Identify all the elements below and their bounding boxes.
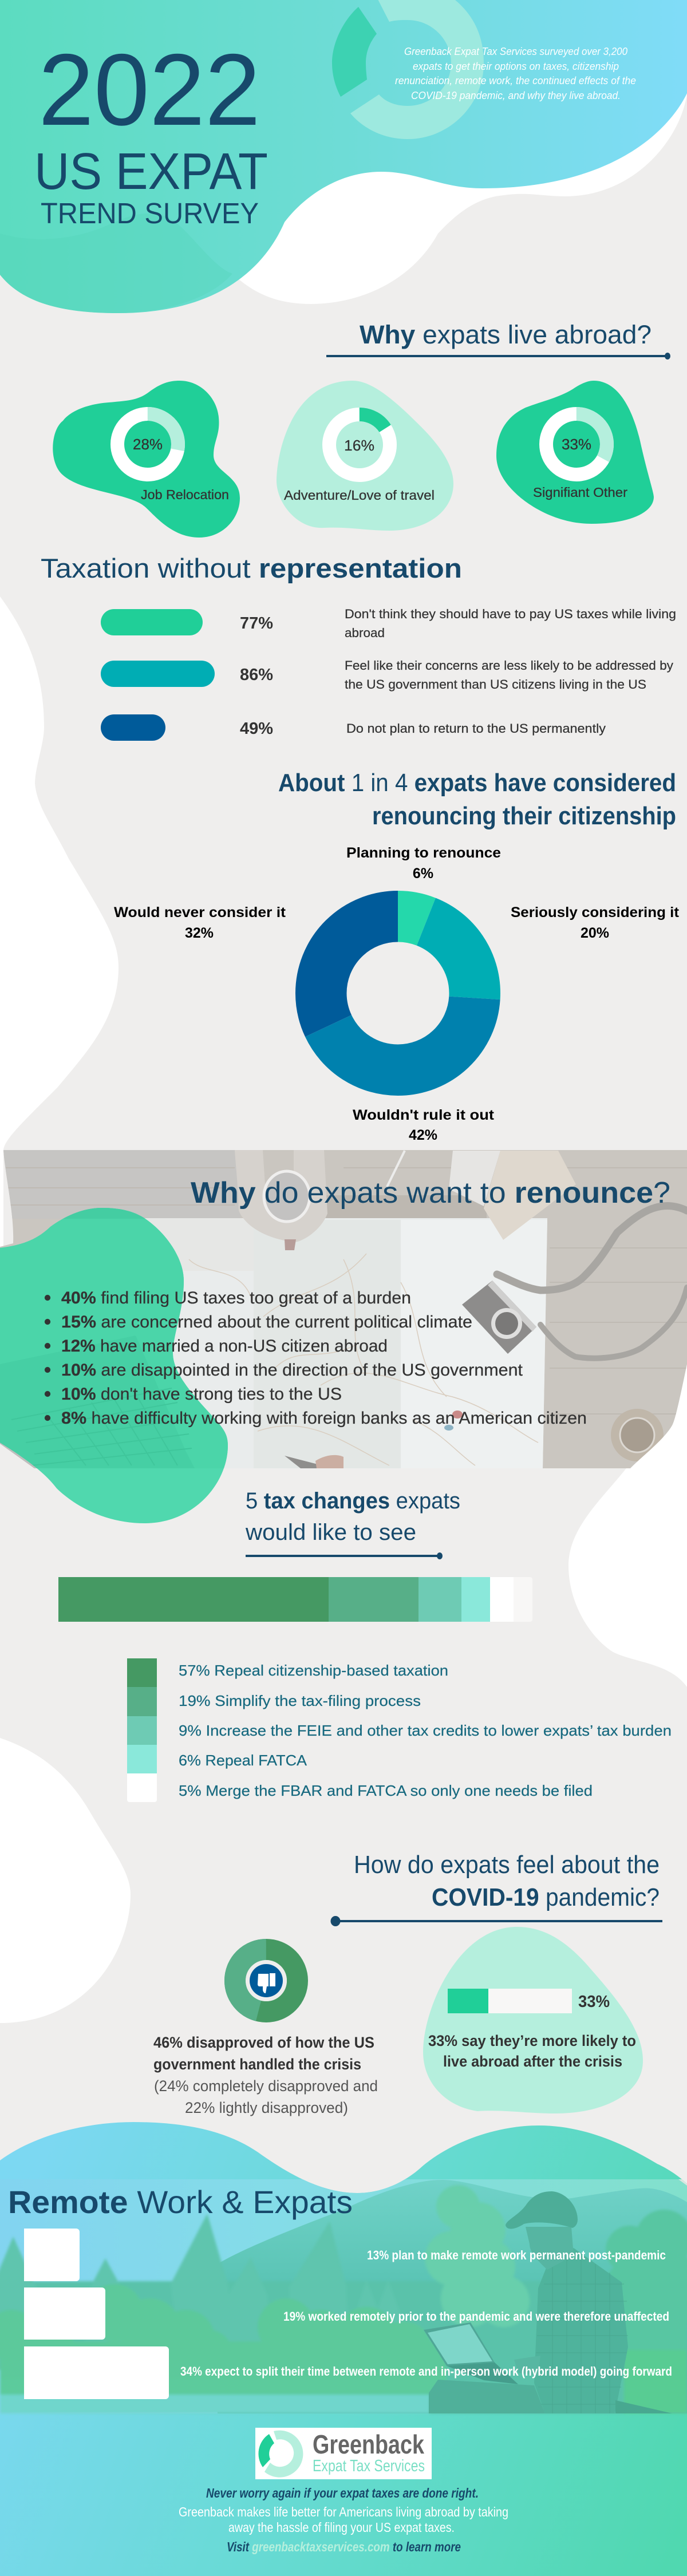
- panel: adventure: Adventure/Love of travel: [284, 488, 435, 503]
- panel: more likely to live abroad: 33%: [578, 1993, 610, 2011]
- chart labels: 20%: [581, 925, 609, 941]
- heading: about 1 in 4: [278, 769, 676, 830]
- heading: 5 tax changes: 5 tax changes expats: [246, 1488, 460, 1514]
- row: 77 percent: 77%: [240, 614, 273, 633]
- heading: why expats live abroad: Why expats live abroad?: [360, 320, 652, 349]
- panel: disapproval donut: [235, 1950, 298, 2012]
- bullet list: reasons to renounce: [45, 1289, 587, 1428]
- panel: significant other: Signifiant Other: [533, 485, 627, 500]
- heading divider with dot: [246, 1552, 443, 1559]
- bullet list: reasons to renounce: 12% have married a non-US citizen abroad: [61, 1337, 388, 1356]
- row: 49 percent: Do not plan to return to the US permanently: [346, 721, 606, 736]
- logo: greenback: Greenback: [313, 2429, 424, 2459]
- bullet list: reasons to renounce: 15% are concerned about the current political climate: [61, 1313, 472, 1332]
- title: 2022: [38, 33, 260, 147]
- chart labels: 6%: [413, 866, 433, 882]
- disapproval text: government handled the crisis: [153, 2056, 361, 2073]
- intro paragraph: expats to get their options on taxes, citizenship: [413, 61, 619, 72]
- heading: 5 tax changes: [245, 1488, 460, 1545]
- closing message: Visit greenbacktaxservices.com to learn more: [227, 2539, 461, 2554]
- heading: covid-19: How do expats feel about the: [354, 1851, 660, 1879]
- chart labels: Seriously considering it: [511, 904, 680, 920]
- bullet list: reasons to renounce: 10% are disappointed in the direction of the US government: [61, 1361, 523, 1380]
- title: TREND SURVEY: [41, 197, 259, 230]
- intro paragraph: renunciation, remote work, the continued effects of the: [395, 75, 636, 86]
- heading divider with dot: [326, 353, 670, 359]
- chart labels: Wouldn't rule it out: [353, 1107, 495, 1123]
- green blob over photo: [0, 1202, 235, 1528]
- legend: tax changes: 19% Simplify the tax-filing process: [179, 1692, 421, 1709]
- panel: job relocation: 28%: [133, 436, 163, 453]
- intro paragraph: [395, 46, 636, 101]
- heading: covid-19: COVID-19 pandemic?: [432, 1883, 660, 1911]
- heading: remote work: Remote Work & Expats: [8, 2184, 353, 2220]
- legend: tax changes: 5% Merge the FBAR and FATCA so only one needs be filed: [179, 1782, 593, 1799]
- panel: adventure: [277, 381, 453, 531]
- white background wave behind header: [172, 57, 687, 304]
- panel: more likely to live abroad: live abroad after the crisis: [443, 2053, 622, 2070]
- bullet list: reasons to renounce: 8% have difficulty working with foreign banks as an American citizen: [61, 1409, 587, 1428]
- intro paragraph: Greenback Expat Tax Services surveyed over 3,200: [404, 46, 627, 57]
- bullet list: reasons to renounce: 10% don't have strong ties to the US: [61, 1385, 342, 1404]
- title: US EXPAT: [34, 143, 268, 200]
- stacked bar chart: tax changes: [58, 1577, 532, 1622]
- panel: job relocation: Job Relocation: [141, 487, 229, 502]
- disapproval text: 46% disapproved of how the US: [153, 2034, 374, 2051]
- closing message: away the hassle of filing your US expat taxes.: [228, 2520, 455, 2535]
- row: 77 percent: [101, 607, 676, 640]
- row: 49 percent: 49%: [240, 720, 273, 738]
- footer background wave: [0, 2122, 687, 2576]
- legend: tax changes: 6% Repeal FATCA: [179, 1752, 307, 1769]
- chart labels: [114, 845, 680, 1143]
- icon: thumbs down: [258, 1973, 275, 1993]
- title: [34, 33, 268, 230]
- panel: more likely to live abroad: [423, 1927, 643, 2113]
- heading: 5 tax changes: would like to see: [245, 1520, 416, 1545]
- row: 77 percent: Don't think they should have to pay US taxes while living: [345, 607, 676, 621]
- panel: significant other: [496, 381, 654, 524]
- row: 86 percent: 86%: [240, 666, 273, 684]
- legend: tax changes: 9% Increase the FEIE and other tax credits to lower expats’ tax burden: [179, 1722, 672, 1739]
- heading divider with dot: [331, 1916, 662, 1926]
- bullet list: reasons to renounce: 40% find filing US taxes too great of a burden: [61, 1289, 411, 1307]
- heading: taxation without representation: Taxation without representation: [41, 553, 462, 583]
- chart labels: Planning to renounce: [346, 845, 501, 861]
- row: 86 percent: [101, 658, 673, 692]
- panel: job relocation: [53, 381, 240, 538]
- watermark logo ring: [332, 0, 484, 139]
- closing message: Never worry again if your expat taxes are done right.: [206, 2486, 479, 2500]
- photo: map and camera on a desk: [0, 1150, 687, 1469]
- disapproval text: 22% lightly disapproved): [185, 2099, 348, 2116]
- chart labels: 42%: [409, 1127, 437, 1143]
- legend: tax changes: [127, 1658, 672, 1802]
- chart labels: Would never consider it: [114, 904, 286, 920]
- legend: tax changes: 57% Repeal citizenship-based taxation: [179, 1662, 448, 1679]
- heading: covid-19: [354, 1851, 660, 1911]
- panel: significant other: 33%: [562, 436, 591, 453]
- row: 86 percent: Feel like their concerns are less likely to be addressed by: [345, 658, 673, 673]
- closing message: [179, 2486, 508, 2554]
- panel: more likely to live abroad: 33% say they’re more likely to: [428, 2032, 636, 2049]
- intro paragraph: COVID-19 pandemic, and why they live abroad.: [411, 90, 621, 101]
- donut chart: renounce: [321, 916, 475, 1070]
- bar chart: remote work: [24, 2229, 169, 2399]
- row: 77 percent: abroad: [345, 626, 385, 640]
- heading: why renounce: Why do expats want to renounce?: [191, 1176, 670, 1210]
- row: 49 percent: [101, 714, 606, 741]
- white background wave: lower left: [0, 1738, 131, 2023]
- chart labels: 32%: [185, 925, 214, 941]
- row: 86 percent: the US government than US citizens living in the US: [345, 677, 646, 692]
- disapproval text: [153, 2034, 378, 2116]
- closing message: Greenback makes life better for Americans living abroad by taking: [179, 2504, 508, 2519]
- white background wave: left side: [0, 596, 119, 1259]
- remote work labels: [180, 2248, 672, 2379]
- logo: greenback: Expat Tax Services: [313, 2457, 425, 2475]
- white background wave: right side: [568, 1364, 687, 1687]
- photo: remote worker in forest: [0, 2179, 687, 2413]
- logo: greenback: [255, 2428, 432, 2479]
- header blob: [0, 0, 687, 313]
- panel: adventure: 16%: [344, 437, 374, 454]
- disapproval text: (24% completely disapproved and: [154, 2077, 378, 2095]
